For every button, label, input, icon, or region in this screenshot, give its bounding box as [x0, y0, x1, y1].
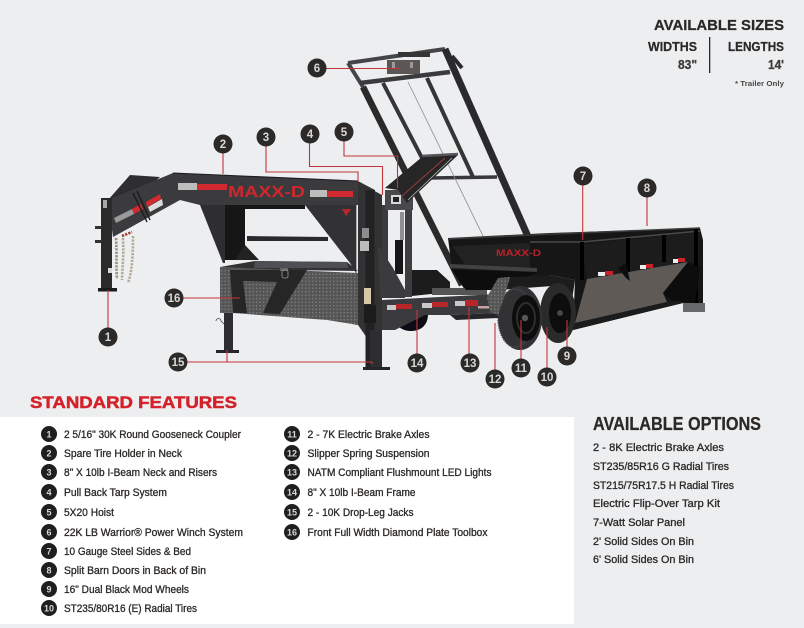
feature 10 — [41, 600, 197, 616]
callout 12: 12 — [489, 374, 501, 386]
callout 10: 10 — [541, 372, 553, 384]
main upright — [358, 182, 382, 345]
decals — [178, 183, 197, 190]
feature 16: 16 — [287, 528, 297, 538]
wheels — [498, 283, 576, 350]
widths: WIDTHS — [648, 39, 697, 54]
callout 4 — [300, 124, 382, 195]
diamond plate toolbox — [220, 261, 358, 325]
callout 9: 9 — [564, 351, 570, 363]
widths: 83" — [678, 57, 697, 72]
feature 12: 12 — [287, 448, 297, 458]
feature 14: 14 — [287, 488, 297, 498]
callout 7 — [574, 166, 592, 240]
trailer illustration — [95, 49, 705, 370]
feature 13 — [284, 464, 492, 480]
option items: 6' Solid Sides On Bin — [593, 554, 694, 566]
callout 4: 4 — [307, 129, 314, 141]
feature 6: 6 — [46, 528, 52, 538]
feature 13: 13 — [287, 468, 297, 478]
lengths: LENGTHS — [728, 39, 784, 54]
feature 6: 22K LB Warrior® Power Winch System — [64, 527, 243, 539]
callout 10 — [538, 327, 556, 386]
callout 5: 5 — [341, 127, 348, 139]
option items: 2 - 8K Electric Brake Axles — [593, 442, 724, 454]
callout 13: 13 — [464, 358, 476, 370]
option items: ST235/85R16 G Radial Tires — [593, 461, 729, 473]
feature 15: 15 — [287, 508, 297, 518]
sizes heading: AVAILABLE SIZES — [654, 17, 784, 34]
feature 1: 1 — [46, 430, 52, 440]
coupler — [95, 198, 117, 292]
callout 14: 14 — [411, 358, 424, 370]
callout 7: 7 — [580, 171, 586, 183]
safety chains — [116, 232, 133, 283]
dump bin — [448, 228, 705, 330]
feature 11: 11 — [287, 430, 297, 440]
feature 8 — [41, 562, 206, 578]
feature 14 — [284, 484, 416, 500]
feature 10: ST235/80R16 (E) Radial Tires — [64, 603, 197, 615]
feature 3 — [41, 464, 217, 480]
option items: 2' Solid Sides On Bin — [593, 536, 694, 548]
side door — [575, 262, 688, 323]
side markers — [598, 272, 605, 276]
widths — [648, 39, 697, 72]
feature 7: 10 Gauge Steel Sides & Bed — [64, 546, 191, 558]
feature 2 — [41, 445, 183, 461]
feature 4: Pull Back Tarp System — [64, 487, 167, 499]
callout 15: 15 — [172, 357, 185, 369]
feature 12 — [284, 445, 430, 461]
rear tire of frame — [394, 314, 428, 331]
available options — [593, 413, 761, 566]
feature 15: 2 - 10K Drop-Leg Jacks — [308, 507, 414, 519]
LED sign: MAXX-D — [496, 248, 542, 258]
feature 11 — [284, 426, 430, 442]
feature 10: 10 — [44, 604, 54, 614]
callout 16 — [164, 288, 240, 308]
feature 6 — [41, 524, 243, 540]
feature 5 — [41, 504, 114, 520]
feature 4 — [41, 484, 167, 500]
feature 3: 8" X 10lb I-Beam Neck and Risers — [64, 467, 217, 479]
rear diamond foot — [683, 303, 705, 312]
feature 16 — [284, 524, 488, 540]
I-beam frame — [382, 277, 510, 330]
feature 4: 4 — [46, 488, 52, 498]
lengths: 14' — [768, 57, 784, 72]
callout 1: 1 — [105, 332, 112, 344]
feature 8: Split Barn Doors in Back of Bin — [64, 565, 206, 577]
panel: standard features — [0, 417, 574, 624]
feature 9: 9 — [46, 584, 52, 594]
callout 6 — [308, 58, 400, 78]
standard features heading: STANDARD FEATURES — [30, 393, 237, 412]
feature 1: 2 5/16" 30K Round Gooseneck Coupler — [64, 429, 241, 441]
winch — [387, 52, 430, 74]
hoist — [385, 154, 458, 203]
feature 1 — [41, 426, 241, 442]
feature 9: 16" Dual Black Mod Wheels — [64, 584, 189, 596]
trailer note: * Trailer Only — [735, 79, 785, 88]
feature 2: 2 — [46, 448, 52, 458]
callout 9 — [558, 320, 576, 366]
option items — [593, 442, 734, 566]
gooseneck: MAXX-D — [228, 184, 305, 201]
option items: Electric Flip-Over Tarp Kit — [593, 498, 720, 510]
callout 3: 3 — [263, 132, 269, 144]
feature 15 — [284, 504, 414, 520]
feature 16: Front Full Width Diamond Plate Toolbox — [308, 527, 488, 539]
feature 12: Slipper Spring Suspension — [308, 448, 430, 460]
feature 7 — [41, 543, 191, 559]
callout 5 — [334, 122, 398, 188]
feature 9 — [41, 581, 189, 597]
feature 8: 8 — [46, 566, 52, 576]
callout 8 — [638, 178, 656, 226]
feature 2: Spare Tire Holder in Neck — [64, 448, 183, 460]
callout 15 — [168, 350, 372, 372]
callout 8: 8 — [644, 183, 651, 195]
feature 13: NATM Compliant Flushmount LED Lights — [308, 467, 492, 479]
available sizes block — [648, 17, 785, 88]
callout 6: 6 — [314, 63, 320, 75]
options heading: AVAILABLE OPTIONS — [593, 413, 761, 434]
callout 16: 16 — [168, 293, 180, 305]
callout 3 — [256, 128, 358, 182]
feature 14: 8" X 10lb I-Beam Frame — [308, 487, 416, 499]
callout 13 — [460, 307, 480, 372]
tarp frame — [348, 49, 545, 285]
callout 2 — [214, 134, 232, 174]
callout 12 — [486, 323, 504, 388]
feature 11: 2 - 7K Electric Brake Axles — [308, 429, 430, 441]
gooseneck — [108, 173, 405, 370]
callout 14 — [408, 310, 426, 372]
callout 2: 2 — [220, 139, 226, 151]
feature 5: 5X20 Hoist — [64, 507, 114, 519]
lengths — [728, 39, 784, 72]
callout 11 — [512, 320, 530, 378]
feature 7: 7 — [46, 546, 52, 556]
callout 1 — [98, 290, 118, 346]
lift mechanism — [382, 190, 575, 300]
drop-leg jacks — [216, 288, 390, 370]
gussets — [200, 205, 225, 263]
callout 11: 11 — [515, 363, 528, 375]
option items: ST215/75R17.5 H Radial Tires — [593, 480, 734, 492]
feature 5: 5 — [46, 508, 52, 518]
option items: 7-Watt Solar Panel — [593, 517, 685, 529]
feature 3: 3 — [46, 468, 52, 478]
